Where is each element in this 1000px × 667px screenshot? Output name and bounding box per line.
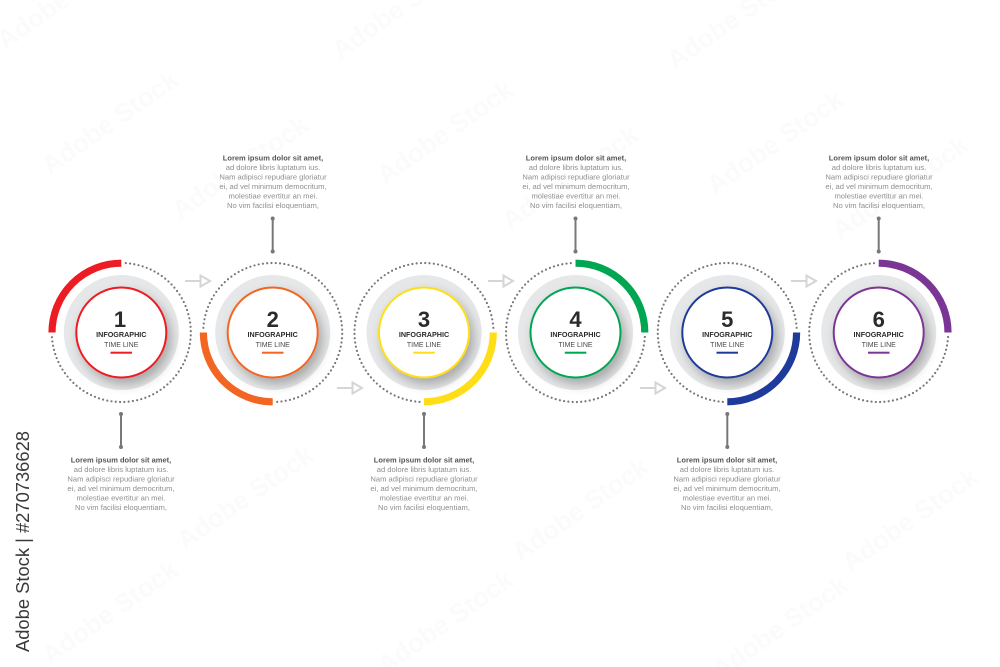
red arc [52,263,121,332]
step 4 [506,263,645,402]
dotted ring 6 [809,263,948,402]
text block 4: Nam adipisci repudiare gloriatur [522,172,630,182]
number 1: 1 [114,307,126,332]
yellow arc [424,332,493,402]
label 4: INFOGRAPHIC [550,330,601,339]
text block 5: molestiae evertitur an mei. [682,494,772,502]
text block 1: No vim facilisi eloquentiam, [75,503,167,512]
dotted ring 2 [203,263,342,402]
text block 1 [67,456,175,512]
text block 6: molestiae evertitur an mei. [834,192,924,200]
sublabel 1: TIME LINE [104,342,139,349]
watermark pattern: Adobe Stock [371,74,519,190]
label 2: INFOGRAPHIC [248,330,298,339]
text block 2: ad dolore libris luptatum ius. [226,163,320,172]
underline 2 [262,352,284,354]
text block 4: Lorem ipsum dolor sit amet, [526,154,626,162]
text block 4: molestiae evertitur an mei. [531,192,621,200]
watermark pattern: Adobe Stock [166,109,314,225]
text block 4: ei, ad vel minimum democritum, [522,182,630,191]
arrow 5 to 6 [791,276,816,286]
underline 5 [716,352,738,354]
dotted ring 1 [52,263,191,402]
white face 4 [530,288,620,378]
gray disc 2 [215,275,330,390]
dotted ring 4 [506,263,645,402]
text block 6: Nam adipisci repudiare gloriatur [825,172,933,182]
text block 5 [673,456,781,512]
text block 1: molestiae evertitur an mei. [76,494,166,502]
watermark pattern: Adobe Stock [171,439,319,555]
underline 3 [413,352,435,354]
arrow 1 to 2 [185,276,210,286]
connector 2 [271,216,275,254]
text block 5: No vim facilisi eloquentiam, [681,503,773,512]
text block 4: No vim facilisi eloquentiam, [530,201,622,210]
text block 3: ei, ad vel minimum democritum, [370,484,478,493]
text block 2: Lorem ipsum dolor sit amet, [223,154,323,162]
connector 5 [725,412,729,449]
watermark pattern: Adobe Stock [496,119,644,235]
text block 1: ei, ad vel minimum democritum, [67,484,175,493]
sublabel 4: TIME LINE [558,342,593,349]
text block 3: molestiae evertitur an mei. [379,494,469,502]
arrow 4 to 5 [640,382,665,394]
text block 3: Lorem ipsum dolor sit amet, [374,456,474,464]
gray disc 4 [518,275,633,390]
dotted ring 3 [354,263,493,402]
green arc [576,263,645,332]
watermark pattern: Adobe Stock [506,451,654,567]
watermark pattern: Adobe Stock [36,554,184,667]
text block 6 [825,154,933,210]
orange arc [203,332,273,402]
label 1: INFOGRAPHIC [96,330,146,339]
text block 5: Nam adipisci repudiare gloriatur [673,474,781,484]
connector 3 [422,412,426,449]
watermark pattern: Adobe Stock [826,129,974,245]
step 5 [658,263,797,402]
sublabel 3: TIME LINE [407,342,441,349]
sublabel 2: TIME LINE [256,342,290,349]
step 1 [52,263,191,402]
white face 6 [834,288,924,378]
text block 1: Nam adipisci repudiare gloriatur [67,474,175,484]
gray disc 6 [821,275,936,390]
connector 6 [877,216,881,254]
gray disc 1 [64,275,179,390]
stock id label: Adobe Stock | #270736628 [13,431,33,652]
text block 2 [219,154,327,210]
arrow 2 to 3 [337,382,362,394]
text block 3: ad dolore libris luptatum ius. [377,465,471,474]
white face 2 [228,288,318,378]
text block 6: ad dolore libris luptatum ius. [832,163,926,172]
text block 3 [370,456,478,512]
white face 1 [76,288,166,378]
connector 4 [574,216,578,254]
label 3: INFOGRAPHIC [399,330,449,339]
text block 5: ad dolore libris luptatum ius. [680,465,774,474]
purple arc [879,263,948,332]
watermark pattern: Adobe Stock [36,64,184,180]
sublabel 5: TIME LINE [710,342,745,349]
text block 5: Lorem ipsum dolor sit amet, [677,456,777,464]
step 2 [203,263,342,402]
text block 4 [522,154,630,210]
number 5: 5 [721,307,733,332]
underline 1 [110,352,132,354]
number 3: 3 [418,307,430,332]
text block 3: Nam adipisci repudiare gloriatur [370,474,478,484]
number 6: 6 [873,307,885,332]
label 5: INFOGRAPHIC [702,330,752,339]
underline 6 [868,352,890,354]
text block 4: ad dolore libris luptatum ius. [529,163,623,172]
arrow 3 to 4 [488,276,513,286]
dotted ring 5 [658,263,797,402]
text block 5: ei, ad vel minimum democritum, [673,484,781,493]
number 2: 2 [267,307,279,332]
text block 2: ei, ad vel minimum democritum, [219,182,327,191]
text block 6: ei, ad vel minimum democritum, [825,182,933,191]
text block 2: molestiae evertitur an mei. [228,192,318,200]
label 6: INFOGRAPHIC [854,330,904,339]
gray disc 3 [366,275,482,390]
text block 2: Nam adipisci repudiare gloriatur [219,172,327,182]
step 6 [809,263,948,402]
watermark pattern: Adobe Stock [836,461,984,577]
watermark pattern: Adobe Stock [701,84,849,200]
white face 3 [379,288,469,378]
underline 4 [565,352,586,354]
white face 5 [682,288,772,378]
text block 2: No vim facilisi eloquentiam, [227,201,319,210]
text block 1: ad dolore libris luptatum ius. [74,465,168,474]
number 4: 4 [569,307,582,332]
text block 6: Lorem ipsum dolor sit amet, [829,154,929,162]
gray disc 5 [670,275,785,390]
text block 3: No vim facilisi eloquentiam, [378,503,470,512]
blue arc [727,332,797,402]
text block 6: No vim facilisi eloquentiam, [833,201,925,210]
sublabel 6: TIME LINE [862,342,896,349]
text block 1: Lorem ipsum dolor sit amet, [71,456,171,464]
connector 1 [119,412,123,449]
step 3 [354,263,493,402]
